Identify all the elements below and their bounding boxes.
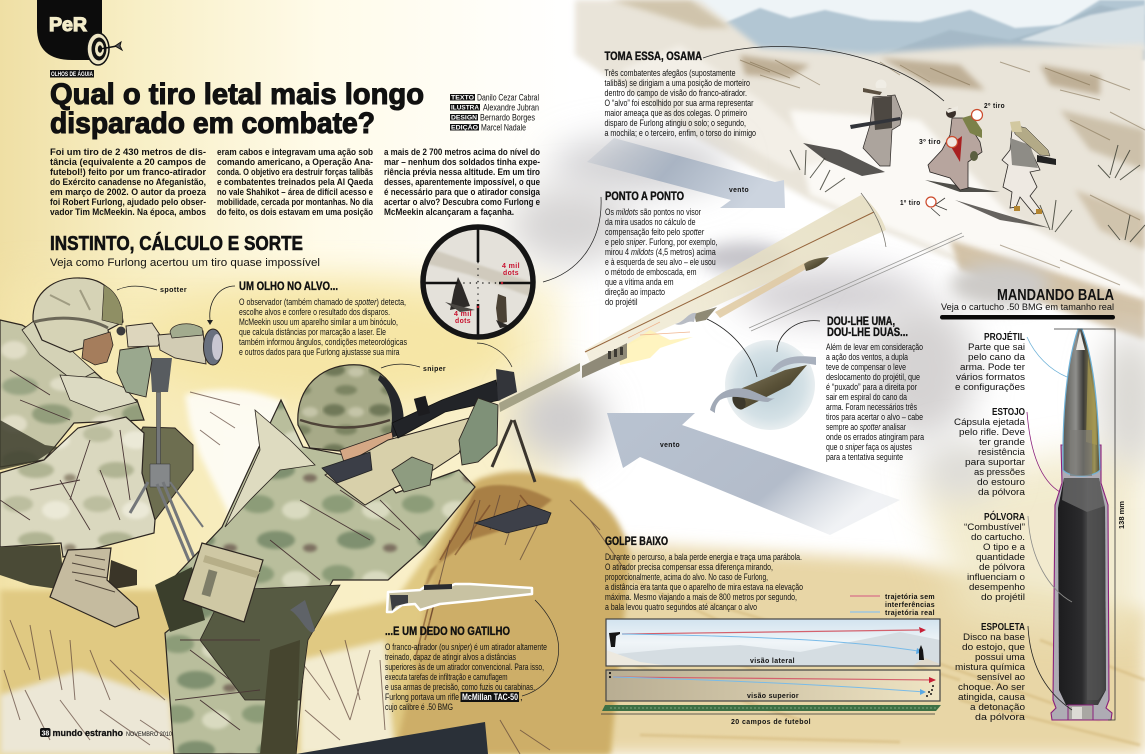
arrow: dou-lhe to ball [777,321,820,352]
arrow: scope link [477,343,512,367]
intro text: e combatentes treinados pela Al Qaeda [217,177,374,188]
label: estojo: do estouro [977,477,1025,487]
bullet trajectory beam [582,193,964,378]
intro text: do feito, os dois estavam em uma posição [217,207,373,218]
text block: e um dedo no gatilho: e usa armas de precisão, como fuzis ou carabinas. [385,682,535,693]
marker: 1st shot [900,197,947,216]
intro text: mar – nenhum dos soldados tinha expe- [384,157,540,168]
face [82,332,113,365]
label: espoleta: possui uma [975,652,1025,662]
intro text: tância (equivalente a 20 campos de [50,157,206,168]
legend: interferências [885,602,935,609]
intro text: acertar o alvo? Descubra como Furlong e [384,197,540,208]
text block: golpe baixo [605,536,803,613]
measure line [1054,329,1115,720]
label: 4 mil dots lower: 4 mil [454,311,472,318]
arrow: rifle [522,600,559,696]
helmet [33,278,123,352]
intro text: desses, aparentemente impossível, o que [384,177,540,188]
text block: ponto a ponto: e pelo sniper. Furlong, por exemplo, [605,237,718,248]
label: espoleta: da pólvora [975,712,1025,722]
label: espoleta: mistura química [955,662,1025,672]
helmet [298,365,404,452]
text block: ponto a ponto [605,191,718,308]
legend [850,594,935,617]
text block: golpe baixo: Durante o percurso, a bala perde energia e traça uma parábola. [605,552,802,563]
text block: e um dedo no gatilho: O franco-atirador (ou sniper) é um atirador altamente [385,642,547,653]
label: top view: visão superior [747,693,799,700]
shadowed waist [200,585,340,700]
wind arrow upper [587,138,785,208]
mountain landscape [690,0,1145,60]
panel: side view [606,619,940,666]
text block: e um dedo no gatilho: cujo calibre é .50 BMG [385,702,453,713]
text block: dou-lhe uma: para a tentativa seguinte [826,452,903,463]
section tag: OLHOS DE ÁGUIA [51,69,93,78]
intro text: vador Tim McMeekin. Na época, ambos [50,207,206,218]
label: espoleta: atingida, causa [958,692,1025,702]
heading: mandando bala: MANDANDO BALA [997,287,1114,304]
icon: target silhouette [919,645,924,660]
label: estojo: para suportar [965,457,1025,467]
muzzle flash [582,322,693,378]
label: 138 mm: 138 mm [1119,501,1126,529]
text block: ponto a ponto: e à esquerda de seu alvo – ele usou [605,257,716,268]
label: espoleta: sensível ao [977,672,1025,682]
text block: dou-lhe uma: que o sniper faça os ajustes [826,442,912,453]
text block: e um dedo no gatilho: Furlong portava um rifle [385,692,459,703]
label: projetil: e configurações [955,382,1026,392]
intro text [50,147,541,218]
label: polvora: influenciam o [967,572,1025,582]
credits: Bernardo Borges [480,112,535,122]
label: espoleta: Disco na base [963,632,1025,642]
label: espoleta: ESPOLETA [981,622,1025,633]
target figures [803,80,1056,228]
text block: toma essa, osama: TOMA ESSA, OSAMA [604,51,702,63]
label: sniper [381,364,446,373]
label: estojo: da pólvora [978,487,1025,497]
label: 4 mil dots: dots [503,270,519,277]
text block: toma essa, osama: maior ameaça que as dos colegas. O primeiro [604,108,747,119]
face [340,432,398,478]
intro text: eram cabos e integravam uma ação sob [217,147,373,158]
heading: mandando bala [940,287,1115,320]
label: 4 mil dots [502,263,520,277]
text block: dou-lhe uma: sair em espiral do cano da [826,392,907,403]
intro text: em março de 2002. O autor da proeza [50,187,207,198]
boot [50,548,139,627]
text block: dou-lhe uma: a ação dos ventos, a dupla [826,352,908,363]
label: vento: vento [729,187,749,194]
cartridge [1051,329,1126,720]
text block: e um dedo no gatilho: ...E UM DEDO NO GATILHO [385,626,510,638]
arrow head: um olho [207,320,213,325]
carabiner [290,600,315,632]
icon: target and dart [87,33,122,65]
intro text: Foi um tiro de 2 430 metros de dis- [50,147,206,158]
label: projetil [955,330,1026,392]
label: 4 mil dots lower [454,311,472,325]
rear leg [111,427,193,520]
callout line: estojo [1027,412,1060,492]
bullet [1063,329,1100,476]
wind arrow lower [607,413,900,535]
logo text: PeR [49,15,87,36]
text block: dou-lhe uma: DOU-LHE DUAS... [827,327,908,339]
label: sniper: sniper [423,366,446,373]
fog clouds [510,137,1145,500]
credits: TEXTO [451,96,474,102]
text block: golpe baixo: a bala levou quatro segundos até alcançar o alvo [605,602,757,613]
intro text: foi Robert Furlong, ajudado pelo obser- [50,197,206,208]
binoculars [116,323,222,365]
intro text: riência prévia nessa altitude. Em um tiro [384,167,540,178]
text block: e um dedo no gatilho: McMillan TAC-50 [462,692,518,703]
text block: um olho no alvo: UM OLHO NO ALVO... [239,281,338,293]
label: projetil: arma. Pode ter [960,362,1025,372]
magazine [475,505,551,533]
text block: golpe baixo: GOLPE BAIXO [605,536,668,548]
legend: trajetória sem [885,594,935,601]
intro text: mobilidade, cercada por montanhas. No dia [217,197,374,208]
marker: 2nd shot [972,103,1005,120]
text block: um olho no alvo: e outros dados para que Furlong ajustasse sua mira [239,347,400,358]
text block: dou-lhe uma: Além de levar em consideração [826,342,923,353]
section heading [50,232,320,269]
intro text: comando americano, a Operação Ana- [217,157,373,168]
primer [1068,705,1093,720]
text block: dou-lhe uma [826,316,924,463]
footer [40,728,172,738]
text block: golpe baixo: a distância era tanta que o aparelho de mira estava na elevação [605,582,803,593]
text block: ponto a ponto: Os mildots são pontos no visor [605,207,702,218]
text block: dou-lhe uma: sempre ao spotter analisar [826,422,907,433]
footer: 38 [42,730,49,738]
label: projetil: PROJÉTIL [984,330,1025,343]
label: polvora: O tipo e a [983,542,1025,552]
title: disparado em combate? [50,107,375,140]
torso [0,320,144,467]
credits: Alexandre Jubran [483,102,539,112]
rifle case bottom [296,722,488,754]
text block: toma essa, osama: disparo de Furlong atingiu o solo; o segundo, [604,118,746,129]
marker: 1st shot: 1º tiro [900,200,920,207]
sleeve [60,375,137,412]
credits: ILUSTRA [451,106,480,112]
text block: ponto a ponto: PONTO A PONTO [605,191,684,203]
arrow: um olho [210,286,235,320]
label: espoleta: a detonação [970,702,1025,712]
text block: um olho no alvo: também informou ângulos, condições meteorológicas [239,337,407,348]
label: estojo: Cápsula ejetada [954,417,1025,427]
credits [450,92,539,132]
text block: dou-lhe uma: é “puxado” para a direita por [826,382,918,393]
soccer field scale [601,705,941,726]
rifle [322,363,580,505]
text block: um olho no alvo: que calcula distâncias por marcação a laser. Ele [239,327,386,338]
sniper soldier [155,363,580,754]
bipod [492,420,535,482]
label: polvora: “Combustível” [964,522,1025,532]
text block: dou-lhe uma: teve de compensar o leve [826,362,906,373]
spotter soldier [0,278,222,627]
text block: toma essa, osama: dentro do campo de visão do franco-atirador. [604,88,747,99]
collar [22,320,95,382]
glove [117,346,152,397]
label: estojo: pelo rifle. Deve [959,427,1025,437]
gloves [459,398,498,465]
label: polvora: de pólvora [979,562,1025,572]
text block: um olho no alvo: escolhe alvos e confere o resultado dos disparos. [239,307,390,318]
text block: ponto a ponto: que a vítima anda em [605,277,674,288]
callout line: projetil [1027,337,1067,377]
text block: ponto a ponto: do projétil [605,297,638,308]
figure: second fighter hit [925,106,1000,192]
ground left [0,390,630,754]
text block: toma essa, osama: a mochila; e o terceiro, enfim, o torso do inimigo [604,128,756,139]
sand dune slope [575,0,1145,340]
title [50,78,424,140]
text block: dou-lhe uma: onde os errados atingiram para [826,432,924,443]
label: projetil: Parte que sai [968,342,1025,352]
marker: 2nd shot: 2º tiro [984,103,1005,110]
label: spotter [117,286,187,294]
label: projetil: vários formatos [956,372,1026,382]
text block: ponto a ponto: direção ao impacto [605,287,665,298]
icon: shooter silhouette [609,632,620,647]
credits: EDIÇÃO [451,124,478,132]
text block: ponto a ponto: o método de emboscada, em [605,267,697,278]
text block: dou-lhe uma: tiros para acertar o alvo – cabe [826,412,923,423]
label: 4 mil dots lower: dots [455,318,471,325]
title: Qual o tiro letal mais longo [50,78,424,111]
label: polvora: quantidade [976,552,1025,562]
intro text: é necessário para que o atirador consiga [384,187,541,198]
label: spotter: spotter [160,287,187,294]
tripod [130,358,203,563]
spinning bullet detail [710,340,816,430]
label: polvora: do cartucho. [971,532,1025,542]
panel: top view [606,670,940,701]
rifle small pouches [155,567,205,632]
arrow: osama [703,46,944,101]
icon: spent casing [675,307,717,325]
text block: e um dedo no gatilho: , [520,692,523,703]
text block: e um dedo no gatilho: executa tarefas de infiltração e camuflagem [385,672,508,683]
text block: um olho no alvo [239,281,407,358]
label: scale: 20 campos de futebol [731,719,811,726]
case body [1051,445,1112,720]
label: espoleta: do estojo, que [962,642,1025,652]
label: estojo: ter grande [979,437,1025,447]
body [159,400,475,754]
text block: golpe baixo: O atirador precisa compensar essa diferença mirando, [605,562,773,573]
credits: Danilo Cezar Cabral [477,92,539,102]
text block: um olho no alvo: O observador (também chamado de spotter) detecta, [239,297,406,308]
intro text: no vale Shahikot – área de difícil acesso e [217,187,373,198]
text block: ponto a ponto: mirou 4 mildots (4,5 metros) acima [605,247,716,258]
figure: third fighter [955,121,1056,228]
label: polvora: do projétil [981,592,1025,602]
intro text: futebol!) feito por um franco-atirador [50,167,206,178]
scope view [420,225,540,341]
section heading: Veja como Furlong acertou um tiro quase impossível [50,257,320,269]
text block: toma essa, osama: talibãs) se dirigiam a uma posição de morteiro [604,78,750,89]
callout line: espoleta [1028,626,1072,710]
text block: ponto a ponto: compensação feito pelo spotter [605,227,705,238]
label: polvora: PÓLVORA [984,510,1025,523]
marker: 3rd shot: 3º tiro [919,139,941,146]
text block: e um dedo no gatilho: treinado, capaz de atingir alvos a distâncias [385,652,516,663]
text block: toma essa, osama [604,51,756,139]
text block: e um dedo no gatilho [385,626,547,713]
text block: golpe baixo: máxima. Mesmo viajando a mais de 800 metros por segundo, [605,592,797,603]
heading: mandando bala: Veja o cartucho .50 BMG em tamanho real [941,302,1114,312]
intro text: McMeekin alcançaram a façanha. [384,207,514,218]
label: estojo: resistência [978,447,1025,457]
text block: golpe baixo: proporcionalmente, acima do alvo. No caso de Furlong, [605,572,768,583]
arrow: bullet to casing [707,319,757,377]
credits: DESIGN [451,116,477,122]
rifle silhouette [387,584,532,612]
front leg [0,417,155,557]
text block: ponto a ponto: da mira usados no cálculo de [605,217,696,228]
text block: dou-lhe uma: arma. Foram necessários três [826,402,917,413]
arrow: ponto a ponto to scope [543,197,601,282]
label: polvora: desempenho [969,582,1025,592]
label: side view: visão lateral [750,658,795,665]
label: espoleta: choque. Ao ser [958,682,1025,692]
header tab logo [37,0,122,65]
legend: trajetória real [885,610,935,617]
text block: e um dedo no gatilho: superiores às de um atirador convencional. Para isso, [385,662,544,673]
label: 4 mil dots: 4 mil [502,263,520,270]
figure: first fighter [803,80,902,176]
marker: 3rd shot [919,136,958,148]
text block: toma essa, osama: Três combatentes afegãos (supostamente [604,68,736,79]
label: estojo: ESTOJO [992,407,1025,418]
section tag [50,69,94,78]
main pouch [183,543,263,622]
text block: dou-lhe uma: deslocamento do projétil, que [826,372,920,383]
intro text: a mais de 2 700 metros acima do nível do [384,147,540,158]
text block: dou-lhe uma: DOU-LHE UMA, [827,316,895,328]
icon: flying bullet [804,257,829,271]
text block: toma essa, osama: O “alvo” foi escolhido por sua arma representar [604,98,754,109]
label: estojo [954,407,1026,497]
text block: um olho no alvo: McMeekin usou um aparelho similar a um binóculo, [239,317,398,328]
label: projetil: pelo cano da [968,352,1025,362]
label: vento: vento [660,442,680,449]
footer: NOVEMBRO 2010 [126,731,172,738]
section heading: INSTINTO, CÁLCULO E SORTE [50,232,303,255]
label: estojo: as pressões [974,467,1026,477]
label: polvora [964,510,1025,602]
credits: Marcel Nadale [481,122,526,132]
intro text: conda. O objetivo era destruir forças talibãs [217,167,373,178]
label: espoleta [955,622,1025,722]
callout line: polvora [1028,516,1072,602]
intro text: do Exército canadense no Afeganistão, [50,177,206,188]
footer: mundo estranho [52,728,123,738]
